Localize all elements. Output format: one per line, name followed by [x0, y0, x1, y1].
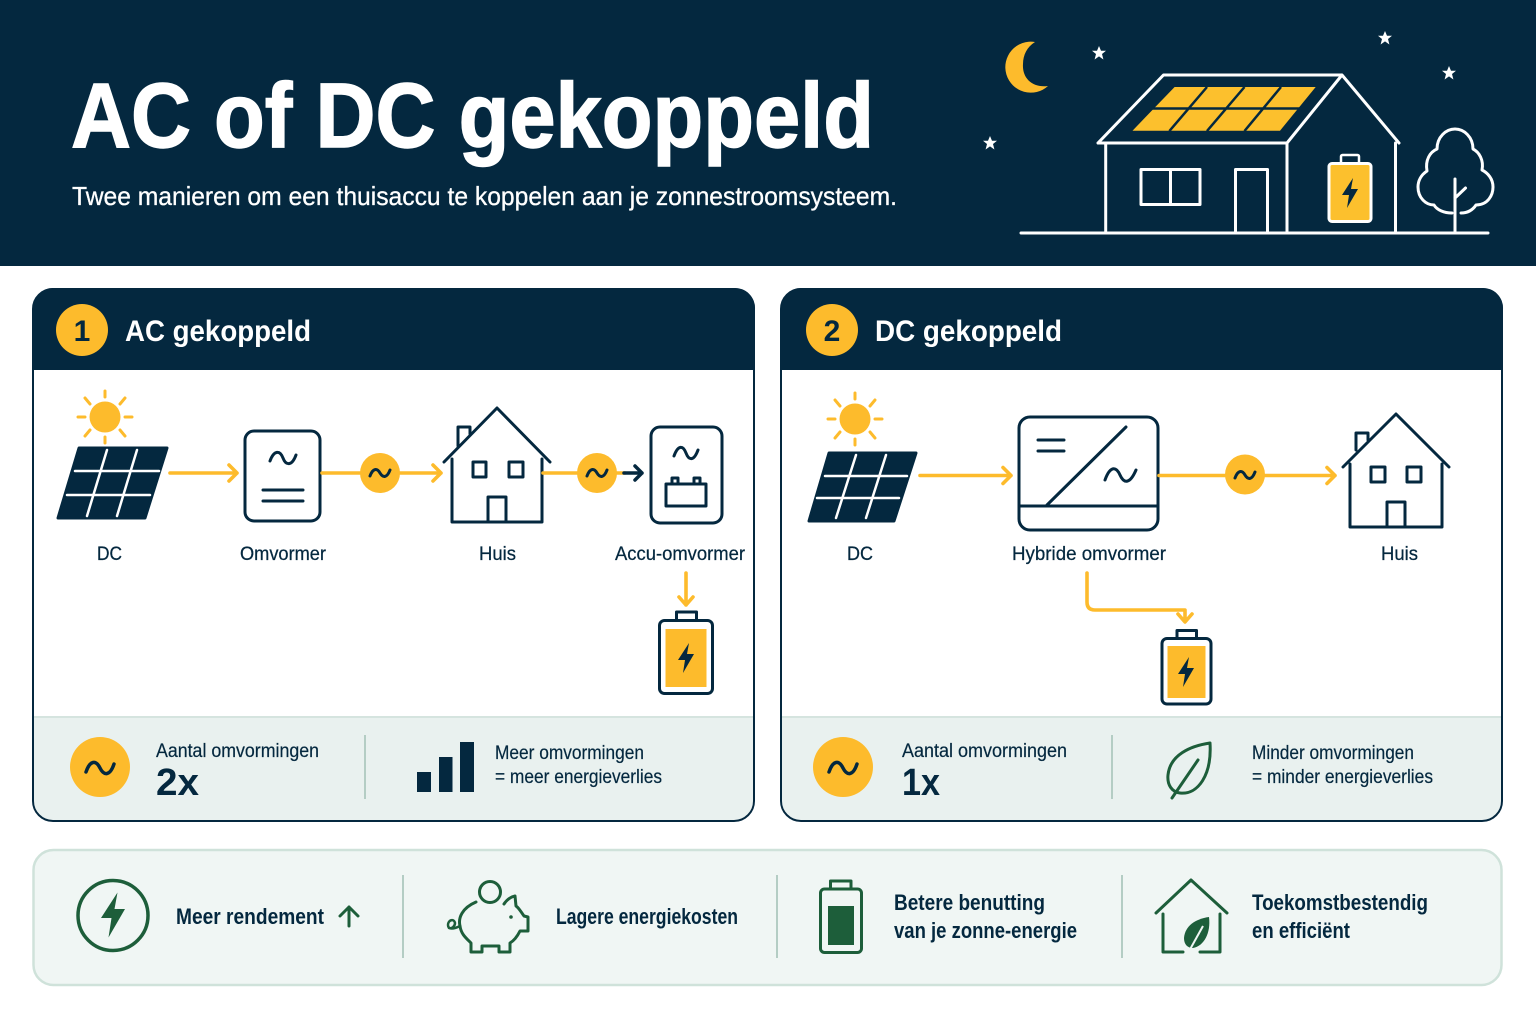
benefit: toekomstbestendig: en efficiënt — [1252, 918, 1351, 943]
icon: inverter — [245, 431, 320, 521]
arrow: panel to inverter — [170, 465, 237, 481]
icon: sun — [78, 391, 132, 443]
badge 1: 1 — [74, 315, 90, 348]
icon: house — [444, 408, 550, 522]
divider — [364, 735, 366, 799]
footer note: more losses — [495, 743, 662, 788]
footer note: less losses: Minder omvormingen — [1252, 743, 1414, 764]
benefit: betere benutting — [820, 881, 1077, 952]
icon: battery inverter — [651, 427, 722, 523]
arrow: inverter to battery — [1087, 573, 1192, 622]
icon: battery — [660, 612, 712, 694]
divider — [776, 875, 778, 958]
icon: battery — [1162, 630, 1211, 704]
icon: leaf — [1168, 743, 1210, 798]
benefit: lagere energiekosten — [448, 882, 738, 952]
benefit: meer rendement: Meer rendement — [176, 904, 325, 929]
benefit: toekomstbestendig — [1156, 880, 1428, 953]
footer note: more losses: = meer energieverlies — [495, 767, 662, 788]
benefit: betere benutting: Betere benutting — [894, 890, 1045, 915]
icon: rising bars — [417, 742, 474, 792]
icon: house with solar roof and battery — [1021, 75, 1488, 233]
header banner — [0, 0, 1536, 266]
panel heading: AC gekoppeld — [125, 315, 311, 348]
title: AC of DC gekoppeld — [71, 65, 874, 167]
divider — [1121, 875, 1123, 958]
panel: benefits bar — [34, 850, 1502, 985]
footer note: more losses: Meer omvormingen — [495, 743, 644, 764]
footer: conversions count: 2x — [156, 762, 199, 804]
icon: solar panel — [58, 448, 167, 518]
panel heading: DC gekoppeld — [875, 315, 1062, 348]
icon: stars — [983, 31, 1456, 150]
label: Huis: Huis — [479, 544, 516, 565]
footer: conversions count: 1x — [902, 762, 940, 804]
connector with AC badge and dark arrow — [543, 453, 642, 493]
icon: solar panel — [809, 453, 916, 521]
badge 1 — [56, 304, 108, 356]
icon: sun — [828, 393, 882, 445]
footer note: less losses — [1252, 743, 1433, 788]
panel: DC gekoppeld — [781, 288, 1503, 821]
benefit: meer rendement — [78, 880, 358, 950]
footer: conversions count: Aantal omvormingen — [902, 741, 1067, 762]
arrow: panel to hybrid inverter — [920, 468, 1011, 484]
label: Omvormer: Omvormer — [240, 544, 327, 565]
divider — [1111, 735, 1113, 799]
divider — [402, 875, 404, 958]
benefit: lagere energiekosten: Lagere energiekosten — [556, 904, 738, 929]
benefit: toekomstbestendig: Toekomstbestendig — [1252, 890, 1428, 915]
label: Huis: Huis — [1381, 544, 1418, 565]
icon: tree — [1418, 129, 1493, 233]
footer: conversions count — [813, 737, 1067, 804]
connector with AC badge — [322, 453, 441, 493]
panel: AC gekoppeld — [33, 288, 755, 821]
footer: conversions count: Aantal omvormingen — [156, 741, 319, 762]
badge 2 — [806, 304, 858, 356]
icon: hybrid inverter — [1019, 417, 1158, 530]
arrow: down to battery — [679, 573, 693, 605]
label: Accu-omvormer: Accu-omvormer — [615, 544, 746, 565]
benefit: betere benutting: van je zonne-energie — [894, 918, 1077, 943]
subtitle: Twee manieren om een thuisaccu te koppelen aan je zonnestroomsysteem. — [72, 181, 897, 211]
label: DC: DC — [847, 544, 873, 565]
icon: moon — [1005, 42, 1048, 93]
label: Hybride omvormer: Hybride omvormer — [1012, 544, 1167, 565]
footer: conversions count — [70, 737, 319, 804]
badge 2: 2 — [824, 315, 840, 348]
icon: house — [1343, 414, 1449, 527]
connector with AC badge — [1159, 454, 1335, 494]
footer note: less losses: = minder energieverlies — [1252, 767, 1433, 788]
label: DC: DC — [97, 544, 122, 565]
